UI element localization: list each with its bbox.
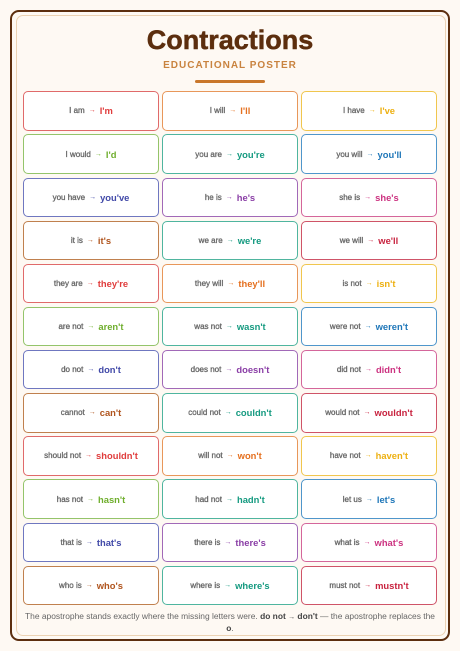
card: would not xyxy=(301,393,437,433)
card: were not: were not xyxy=(330,322,361,331)
card: let us: let's xyxy=(377,494,395,505)
card: should not: → xyxy=(85,452,92,459)
card: they are xyxy=(23,264,159,303)
card: he is: → xyxy=(226,194,233,201)
card: was not: was not xyxy=(194,322,222,331)
card: will not xyxy=(162,436,298,476)
card: I will: I'll xyxy=(240,105,250,116)
card: I will: → xyxy=(229,107,236,114)
card: I have: → xyxy=(369,107,376,114)
card: I have: I've xyxy=(380,105,395,116)
card: you will: you'll xyxy=(378,149,402,160)
card: is not xyxy=(301,264,437,303)
footer note: o. xyxy=(226,623,234,633)
card: have not xyxy=(301,436,437,476)
card: you have: you've xyxy=(100,192,129,203)
card: they will xyxy=(162,264,298,303)
card: she is xyxy=(301,178,437,217)
card: does not xyxy=(162,350,298,389)
card: cannot xyxy=(23,393,159,433)
card: is not: isn't xyxy=(377,278,396,289)
card: must not: must not xyxy=(329,581,360,590)
card: it is: it is xyxy=(71,236,83,245)
card: had not: had not xyxy=(195,495,222,504)
card: must not: mustn't xyxy=(375,580,409,591)
card: do not: do not xyxy=(61,365,83,374)
card: must not xyxy=(301,566,437,605)
card: will not: will not xyxy=(198,451,223,460)
card: we are: we are xyxy=(199,236,223,245)
card: have not: → xyxy=(365,452,372,459)
card: were not: weren't xyxy=(376,321,408,332)
card: I have: I have xyxy=(343,106,365,115)
card: had not xyxy=(162,479,298,519)
card: cannot: can't xyxy=(100,407,121,418)
card: you are: → xyxy=(226,151,233,158)
card: was not: → xyxy=(226,323,233,330)
card: are not: aren't xyxy=(98,321,124,332)
card: are not: → xyxy=(87,323,94,330)
card: where is: where is xyxy=(190,581,220,590)
card: let us: let us xyxy=(343,495,362,504)
card: we are: → xyxy=(227,237,234,244)
card: I would: → xyxy=(95,151,102,158)
card: that is: that is xyxy=(60,538,82,547)
card: have not: haven't xyxy=(376,450,408,461)
card: he is xyxy=(162,178,298,217)
card: who is: who is xyxy=(59,581,82,590)
card: you are: you're xyxy=(237,149,265,160)
card: you have: you have xyxy=(53,193,85,202)
card: it is xyxy=(23,221,159,260)
card: we will: we will xyxy=(340,236,363,245)
card: have not: have not xyxy=(330,451,361,460)
card: she is: → xyxy=(364,194,371,201)
card: where is: → xyxy=(224,582,231,589)
card: I will xyxy=(162,91,298,131)
footer note: The apostrophe stands exactly where the missing letters were. do not → don't — the apostrophe replaces the xyxy=(25,610,435,620)
title underline xyxy=(195,80,265,83)
card: does not: → xyxy=(225,366,232,373)
card: is not: → xyxy=(366,280,373,287)
card: there is xyxy=(162,522,298,562)
card: should not: shouldn't xyxy=(96,450,138,461)
card: will not: → xyxy=(227,452,234,459)
card: they are: they are xyxy=(54,279,83,288)
card: there is: there is xyxy=(194,538,220,547)
card: cannot: → xyxy=(89,409,96,416)
card: she is: she is xyxy=(339,193,360,202)
card: has not: → xyxy=(87,496,94,503)
card: could not xyxy=(162,393,298,433)
card: do not: → xyxy=(87,366,94,373)
card: was not xyxy=(162,307,298,346)
card: could not: could not xyxy=(188,408,221,417)
footer note xyxy=(25,610,435,633)
card: where is xyxy=(162,566,298,605)
card: do not: don't xyxy=(98,364,121,375)
card: should not: should not xyxy=(44,451,81,460)
card: are not: are not xyxy=(58,322,83,331)
card: did not: → xyxy=(365,366,372,373)
title: Contractions xyxy=(147,24,313,54)
card: would not: wouldn't xyxy=(375,407,413,418)
card: they will: they'll xyxy=(238,278,265,289)
card: what is: what is xyxy=(335,538,360,547)
card: there is: there's xyxy=(235,537,266,548)
card: I am: I am xyxy=(69,106,85,115)
card: I am: I'm xyxy=(100,105,113,116)
card: are not xyxy=(23,307,159,346)
card: does not: does not xyxy=(191,365,221,374)
card: would not: → xyxy=(364,409,371,416)
card: you will: you will xyxy=(336,150,363,159)
card: you will: → xyxy=(367,151,374,158)
card: has not: hasn't xyxy=(98,494,125,505)
card: they will: → xyxy=(227,280,234,287)
card: is not: is not xyxy=(342,279,362,288)
card: you have: → xyxy=(89,194,96,201)
card: could not: couldn't xyxy=(236,407,272,418)
card: she is: she's xyxy=(375,192,399,203)
card: let us: → xyxy=(366,496,373,503)
card: had not: hadn't xyxy=(237,494,265,505)
card: he is: he is xyxy=(205,193,222,202)
card: did not: did not xyxy=(337,365,361,374)
card: it is: it's xyxy=(98,235,111,246)
card: I am: → xyxy=(89,107,96,114)
card: do not xyxy=(23,350,159,389)
card: let us xyxy=(301,479,437,519)
card: that is: that's xyxy=(97,537,121,548)
card: we will xyxy=(301,221,437,260)
card: did not: didn't xyxy=(376,364,401,375)
card: what is: → xyxy=(364,539,371,546)
card: cannot: cannot xyxy=(61,408,85,417)
card: we are xyxy=(162,221,298,260)
card: does not: doesn't xyxy=(236,364,269,375)
card: who is: who's xyxy=(97,580,123,591)
card: I would: I'd xyxy=(106,149,116,160)
card: you are xyxy=(162,134,298,174)
card: we will: we'll xyxy=(378,235,398,246)
card: they are: they're xyxy=(98,278,128,289)
card: I am xyxy=(23,91,159,131)
subtitle: EDUCATIONAL POSTER xyxy=(163,60,297,71)
card: you will xyxy=(301,134,437,174)
card: they will: they will xyxy=(195,279,223,288)
card: that is xyxy=(23,522,159,562)
card: had not: → xyxy=(226,496,233,503)
card: I will: I will xyxy=(210,106,225,115)
card: we are: we're xyxy=(238,235,261,246)
card: where is: where's xyxy=(235,580,270,591)
card: I would xyxy=(23,134,159,174)
card: he is: he's xyxy=(237,192,255,203)
card: were not: → xyxy=(365,323,372,330)
card: did not xyxy=(301,350,437,389)
card: you have xyxy=(23,178,159,217)
card: we will: → xyxy=(367,237,374,244)
card: you are: you are xyxy=(195,150,222,159)
card: there is: → xyxy=(224,539,231,546)
card: who is xyxy=(23,566,159,605)
card: were not xyxy=(301,307,437,346)
card: I have xyxy=(301,91,437,131)
card: has not xyxy=(23,479,159,519)
card: was not: wasn't xyxy=(237,321,266,332)
card: that is: → xyxy=(86,539,93,546)
card: will not: won't xyxy=(238,450,262,461)
card: must not: → xyxy=(364,582,371,589)
card: it is: → xyxy=(87,237,94,244)
card: I would: I would xyxy=(66,150,91,159)
card: what is: what's xyxy=(375,537,403,548)
card: has not: has not xyxy=(57,495,83,504)
card: could not: → xyxy=(225,409,232,416)
card: they are: → xyxy=(87,280,94,287)
card: who is: → xyxy=(86,582,93,589)
card: would not: would not xyxy=(325,408,360,417)
card: should not xyxy=(23,436,159,476)
card: what is xyxy=(301,522,437,562)
